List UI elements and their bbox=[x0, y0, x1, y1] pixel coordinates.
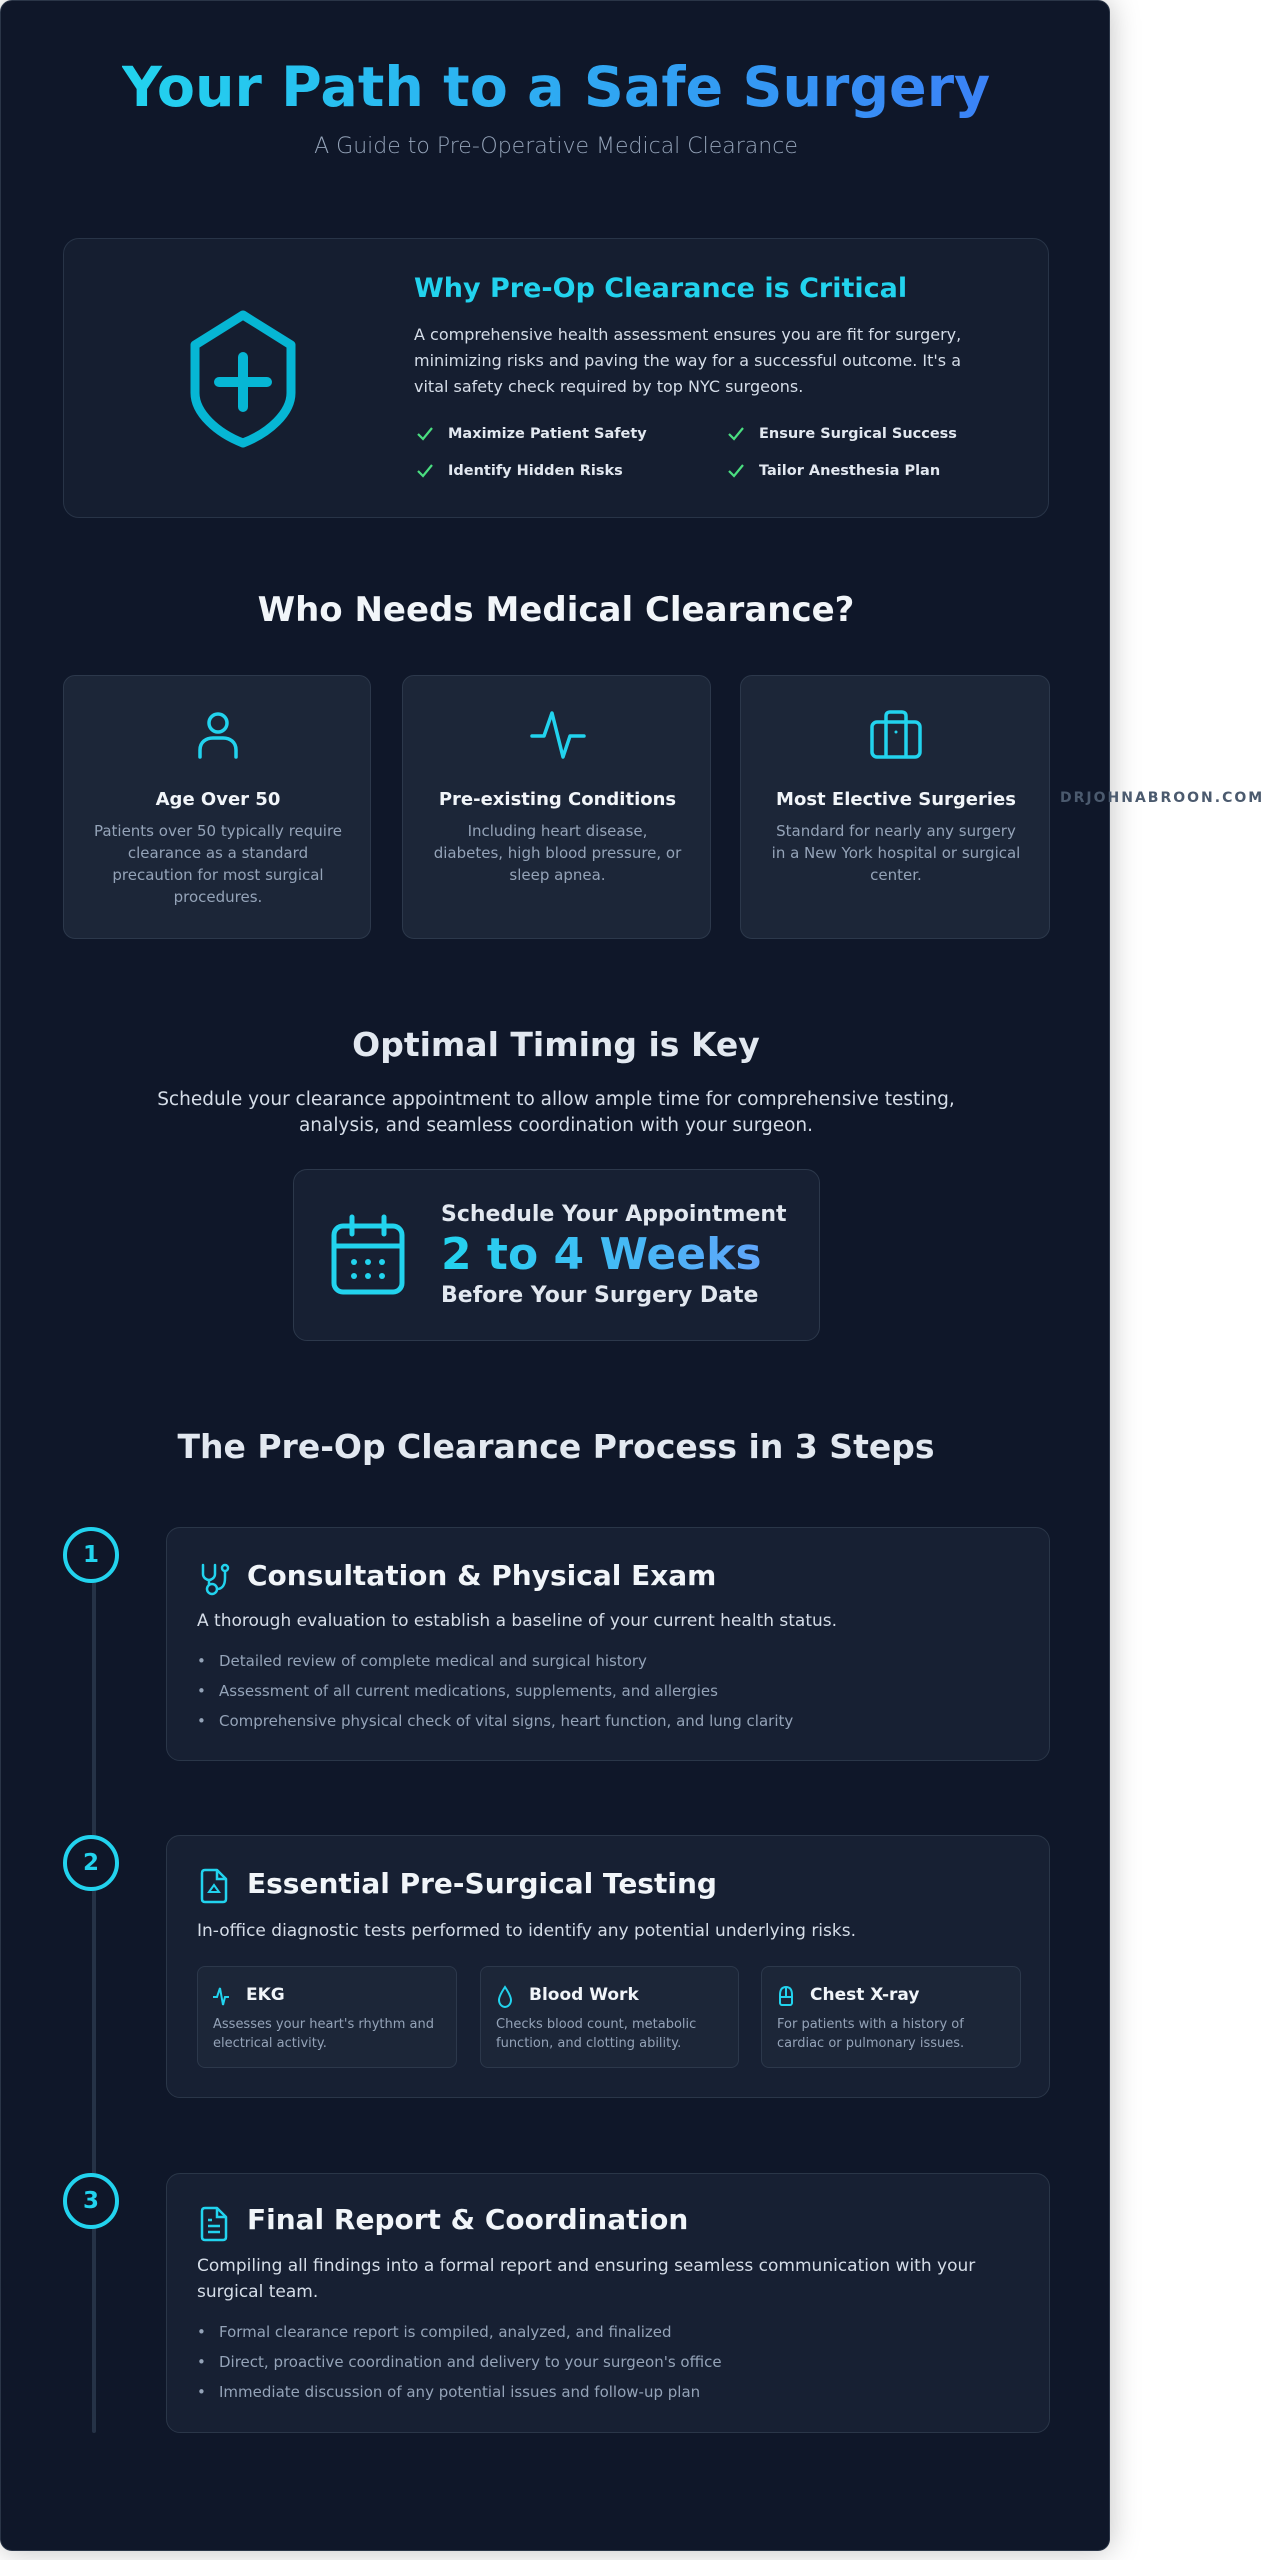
bullet list: Direct, proactive coordination and delivery to your surgeon's office bbox=[219, 2353, 722, 2371]
card: elective: Most Elective Surgeries bbox=[776, 789, 1016, 810]
bullet list: Assessment of all current medications, supplements, and allergies bbox=[219, 1682, 718, 1700]
step 2 number: 2 bbox=[83, 1850, 99, 1876]
card: conditions bbox=[402, 675, 711, 939]
heading: Why Pre-Op Clearance is Critical bbox=[414, 273, 907, 304]
subcard: EKG: Assesses your heart's rhythm and electrical activity. bbox=[213, 2017, 434, 2051]
bullet list: Formal clearance report is compiled, analyzed, and finalized bbox=[219, 2323, 672, 2341]
heading: process: The Pre-Op Clearance Process in 3 Steps bbox=[177, 1427, 934, 1466]
panel: step 2: Essential Pre-Surgical Testing bbox=[247, 1867, 717, 1900]
subcard: blood work bbox=[480, 1966, 739, 2068]
card: conditions: Pre-existing Conditions bbox=[439, 789, 676, 810]
callout: timing box: Schedule Your Appointment bbox=[441, 1202, 787, 1227]
icon: ekg bbox=[213, 1988, 229, 2006]
panel: step 3: Compiling all findings into a formal report and ensuring seamless communication with your surgical team. bbox=[197, 2256, 975, 2302]
heading: optimal timing: Optimal Timing is Key bbox=[352, 1025, 760, 1064]
bullet list: Detailed review of complete medical and surgical history bbox=[219, 1652, 647, 1670]
icon: document bbox=[200, 2206, 228, 2242]
icon: calendar bbox=[332, 1214, 404, 1294]
step 1 number bbox=[63, 1527, 119, 1583]
subtitle: A Guide to Pre-Operative Medical Clearance bbox=[314, 134, 798, 159]
panel: step 1: Consultation & Physical Exam bbox=[247, 1559, 716, 1592]
card: age bbox=[63, 675, 371, 939]
panel: step 3: Final Report & Coordination bbox=[247, 2203, 688, 2236]
panel: step 1 bbox=[166, 1527, 1050, 1761]
heading: who needs: Who Needs Medical Clearance? bbox=[258, 590, 854, 630]
card: conditions: Including heart disease, bbox=[468, 822, 647, 840]
bullet list bbox=[199, 1652, 793, 1730]
step 3 number bbox=[63, 2173, 119, 2229]
watermark: DRJOHNABROON.COM bbox=[1060, 790, 1264, 806]
card: age: Patients over 50 typically require clearance as a standard precaution for most surgical procedures. bbox=[94, 822, 342, 906]
checklist: Identify Hidden Risks bbox=[448, 463, 623, 479]
card: conditions: diabetes, high blood pressure, or bbox=[434, 844, 681, 862]
card: conditions: sleep apnea. bbox=[509, 866, 606, 884]
checklist: Ensure Surgical Success bbox=[759, 426, 957, 442]
subcard: EKG bbox=[197, 1966, 457, 2068]
subcard: chest x-ray bbox=[761, 1966, 1021, 2068]
subcard: EKG: EKG bbox=[246, 1985, 285, 2005]
bullet list bbox=[199, 2323, 722, 2401]
panel: step 3 bbox=[166, 2173, 1050, 2433]
icon: file bbox=[200, 1868, 228, 1904]
step 1 number: 1 bbox=[83, 1542, 99, 1568]
callout: timing box bbox=[293, 1169, 820, 1341]
subcard: chest x-ray: For patients with a history of cardiac or pulmonary issues. bbox=[777, 2017, 964, 2051]
panel: step 1: A thorough evaluation to establish a baseline of your current health status. bbox=[197, 1611, 837, 1631]
subcard: blood work: Blood Work bbox=[529, 1985, 639, 2005]
title: Your Path to a Safe Surgery bbox=[122, 55, 990, 120]
card: age: Age Over 50 bbox=[156, 789, 280, 810]
text: timing description: Schedule your clearance appointment to allow ample time for comprehensive testing, analysis, and seamless coordination with your surgeon. bbox=[157, 1089, 955, 1136]
timeline line bbox=[92, 1561, 96, 2433]
icon: stethoscope bbox=[202, 1564, 230, 1596]
card: elective bbox=[740, 675, 1050, 939]
icon: pulse bbox=[530, 711, 586, 759]
icon: briefcase bbox=[870, 710, 922, 759]
bullet list: Immediate discussion of any potential issues and follow-up plan bbox=[219, 2383, 700, 2401]
step 2 number bbox=[63, 1835, 119, 1891]
icon: shield bbox=[190, 310, 296, 448]
callout: timing box: Before Your Surgery Date bbox=[441, 1283, 758, 1308]
step 3 number: 3 bbox=[83, 2188, 99, 2214]
icon: drop bbox=[498, 1985, 512, 2008]
panel: step 2 bbox=[166, 1835, 1050, 2098]
icon: person bbox=[198, 712, 238, 759]
callout: timing box: 2 to 4 Weeks bbox=[441, 1229, 762, 1280]
text block: A comprehensive health assessment ensures you are fit for surgery, minimizing risks and paving the way for a successful outcome. It's a vital safety check required by top NYC surgeons. bbox=[414, 325, 961, 396]
checklist: Maximize Patient Safety bbox=[448, 426, 647, 442]
checklist bbox=[417, 426, 957, 479]
panel: why critical bbox=[63, 238, 1049, 518]
panel: step 2: In-office diagnostic tests performed to identify any potential underlying risks. bbox=[197, 1921, 856, 1941]
bullet list: Comprehensive physical check of vital signs, heart function, and lung clarity bbox=[219, 1712, 793, 1730]
card: elective: Standard for nearly any surgery in a New York hospital or surgical center. bbox=[772, 822, 1020, 884]
subcard: blood work: Checks blood count, metabolic function, and clotting ability. bbox=[496, 2017, 696, 2051]
checklist: Tailor Anesthesia Plan bbox=[759, 463, 940, 479]
subcard: chest x-ray: Chest X-ray bbox=[810, 1985, 919, 2005]
icon: lungs bbox=[779, 1986, 793, 2006]
